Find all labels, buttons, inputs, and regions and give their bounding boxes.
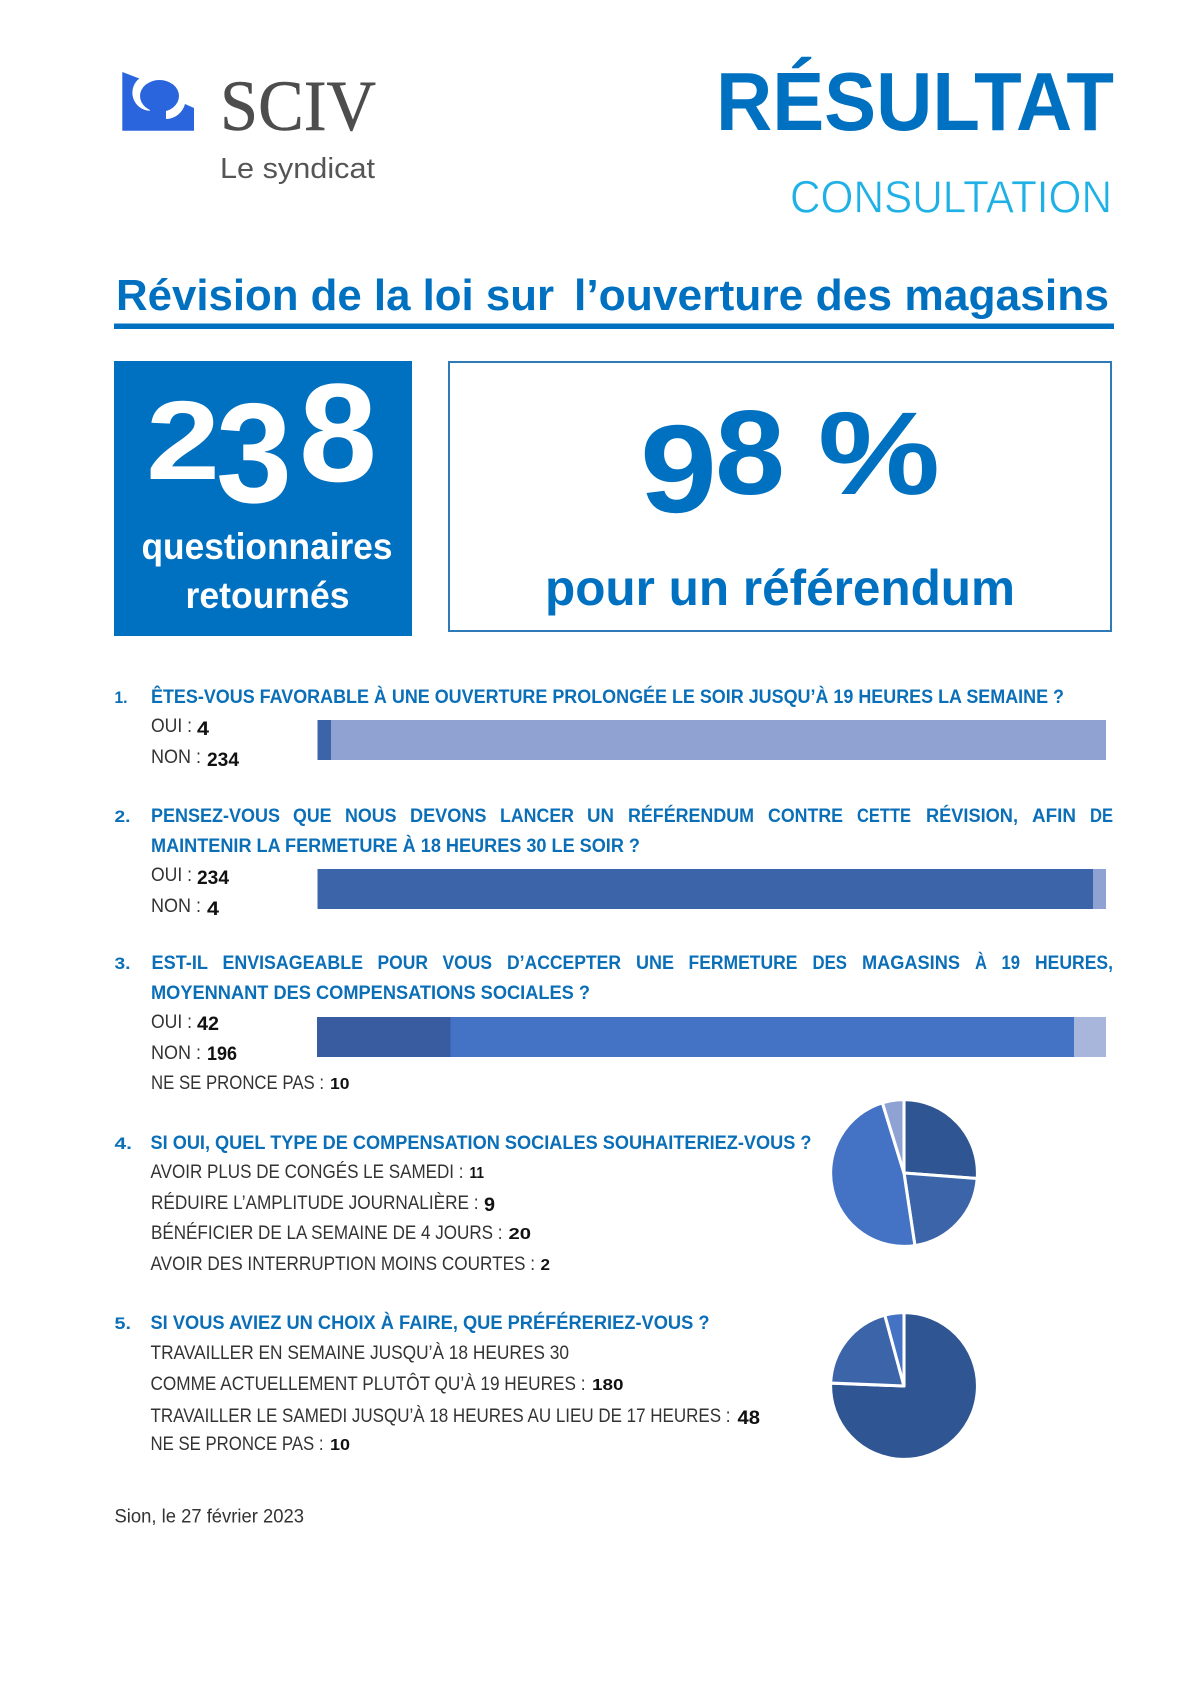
- answers: question 3: 10: [330, 1076, 350, 1093]
- question 4: SI OUI, QUEL TYPE DE COMPENSATION SOCIALES SOUHAITERIEZ-VOUS ?: [150, 1133, 812, 1154]
- answers: question 2: 234: [197, 868, 229, 889]
- answers: question 4: BÉNÉFICIER DE LA SEMAINE DE 4 JOURS :: [151, 1223, 502, 1244]
- answers: question 5: TRAVAILLER EN SEMAINE JUSQU’À 18 HEURES 30: [150, 1343, 569, 1364]
- answers: question 1: 4: [197, 719, 209, 740]
- pie chart: question 5: [831, 1313, 977, 1459]
- question 2: RÉFÉRENDUM: [628, 805, 754, 827]
- question 2: AFIN: [1032, 806, 1076, 827]
- answers: question 1: [151, 716, 239, 771]
- question 2: PENSEZ-VOUS: [151, 806, 280, 827]
- answers: question 2: NON :: [151, 896, 201, 917]
- title: l’ouverture des magasins: [574, 271, 1109, 320]
- big number 238: 8: [299, 354, 377, 511]
- answers: question 4: AVOIR DES INTERRUPTION MOINS COURTES :: [150, 1254, 535, 1275]
- answers: question 5: 10: [330, 1437, 350, 1454]
- question 3: EST-IL: [152, 953, 208, 974]
- subheading: consultation: CONSULTATION: [790, 172, 1112, 222]
- answers: question 3: 42: [197, 1014, 219, 1035]
- question 4: [114, 1100, 977, 1275]
- question 2: DE: [1090, 806, 1113, 827]
- question 3: VOUS: [442, 953, 492, 974]
- answers: question 5: [150, 1343, 760, 1455]
- question 2: 2.: [114, 807, 130, 826]
- big number 98 %: 9: [640, 400, 717, 539]
- question 2: QUE: [293, 806, 332, 827]
- answers: question 1: 234: [207, 750, 239, 771]
- answers: question 4: 11: [470, 1165, 484, 1182]
- question 2: RÉVISION,: [926, 805, 1018, 827]
- question 2: [114, 805, 1113, 920]
- logo tagline: Le syndicat: [220, 153, 375, 185]
- answers: question 3: 196: [207, 1044, 237, 1065]
- question 3: MAGASINS: [862, 953, 960, 974]
- big number 238: 2: [146, 378, 220, 503]
- big number 98 %: 8: [715, 386, 785, 520]
- answers: question 5: 180: [592, 1377, 624, 1394]
- question 5: SI VOUS AVIEZ UN CHOIX À FAIRE, QUE PRÉFÉRERIEZ-VOUS ?: [150, 1312, 710, 1334]
- panel: referendum share: [449, 362, 1111, 631]
- answers: question 3: OUI :: [151, 1012, 192, 1033]
- answers: question 4: AVOIR PLUS DE CONGÉS LE SAMEDI :: [150, 1162, 464, 1183]
- big number 238: 3: [216, 374, 292, 533]
- answers: question 1: NON :: [151, 747, 201, 768]
- answers: question 5: COMME ACTUELLEMENT PLUTÔT QU’À 19 HEURES :: [150, 1373, 586, 1395]
- heading: résultat: RÉSULTAT: [716, 55, 1114, 148]
- answers: question 5: TRAVAILLER LE SAMEDI JUSQU’À 18 HEURES AU LIEU DE 17 HEURES :: [150, 1406, 730, 1427]
- big number 98 %: [640, 386, 940, 539]
- answers: question 4: [150, 1162, 550, 1275]
- big number 238: [146, 354, 377, 533]
- question 3: 19: [1002, 953, 1020, 974]
- questionnaires label: questionnaires: [142, 526, 392, 567]
- title underline: [114, 324, 1114, 329]
- answers: question 5: 48: [738, 1408, 760, 1429]
- answers: question 3: NON :: [151, 1043, 201, 1064]
- answers: question 4: 9: [484, 1195, 495, 1216]
- pie chart: question 4: [831, 1100, 977, 1246]
- answers: question 2: 4: [207, 899, 219, 920]
- answers: question 3: [151, 1012, 350, 1094]
- question 3: DES: [812, 953, 847, 974]
- title: [116, 271, 1109, 320]
- question 3: MOYENNANT DES COMPENSATIONS SOCIALES ?: [151, 983, 590, 1004]
- logo: SCIV: [122, 66, 376, 185]
- question 3: ENVISAGEABLE: [222, 953, 363, 974]
- question 1: ÊTES-VOUS FAVORABLE À UNE OUVERTURE PROLONGÉE LE SOIR JUSQU’À 19 HEURES LA SEMAINE ?: [151, 686, 1064, 708]
- question 3: HEURES,: [1035, 953, 1113, 974]
- answers: question 2: [151, 865, 229, 920]
- question 5: [114, 1312, 977, 1459]
- question 2: MAINTENIR LA FERMETURE À 18 HEURES 30 LE SOIR ?: [151, 835, 640, 857]
- question 3: FERMETURE: [688, 953, 798, 974]
- question 2: CETTE: [857, 806, 911, 827]
- referendum label: pour un référendum: [545, 560, 1015, 616]
- question 3: D’ACCEPTER: [507, 953, 621, 974]
- panel: questionnaires returned: retournés: [186, 575, 350, 616]
- question 2: NOUS: [345, 806, 396, 827]
- question 3: POUR: [378, 953, 428, 974]
- question 3: 3.: [114, 954, 130, 973]
- big number 98 %: %: [818, 388, 940, 520]
- bar chart: question 1: [318, 720, 1106, 760]
- icon: SCIV emblem: [122, 72, 194, 131]
- question 1: 1.: [114, 688, 128, 707]
- answers: question 4: 20: [508, 1226, 531, 1243]
- question 2: DEVONS: [410, 806, 486, 827]
- bar chart: question 2: [318, 869, 1106, 909]
- question 2: UN: [587, 806, 614, 827]
- answers: question 4: 2: [540, 1257, 550, 1274]
- question 4: 4.: [114, 1134, 132, 1153]
- answers: question 1: OUI :: [151, 716, 192, 737]
- question 3: À: [975, 952, 987, 974]
- title: Révision de la loi sur: [116, 271, 554, 320]
- question 3: [114, 952, 1113, 1094]
- question 2: LANCER: [500, 806, 574, 827]
- question 1: [114, 686, 1106, 771]
- bar chart: question 3: [317, 1017, 1106, 1057]
- logo wordmark: SCIV: [220, 66, 376, 146]
- question 5: 5.: [114, 1314, 131, 1333]
- answers: question 3: NE SE PRONCE PAS :: [151, 1073, 324, 1094]
- question 2: CONTRE: [768, 806, 843, 827]
- answers: question 4: RÉDUIRE L’AMPLITUDE JOURNALIÈRE :: [151, 1193, 478, 1214]
- panel: questionnaires returned: [114, 354, 412, 636]
- answers: question 2: OUI :: [151, 865, 192, 886]
- answers: question 5: NE SE PRONCE PAS :: [150, 1434, 324, 1455]
- footer date: Sion, le 27 février 2023: [114, 1506, 304, 1528]
- question 3: UNE: [636, 953, 674, 974]
